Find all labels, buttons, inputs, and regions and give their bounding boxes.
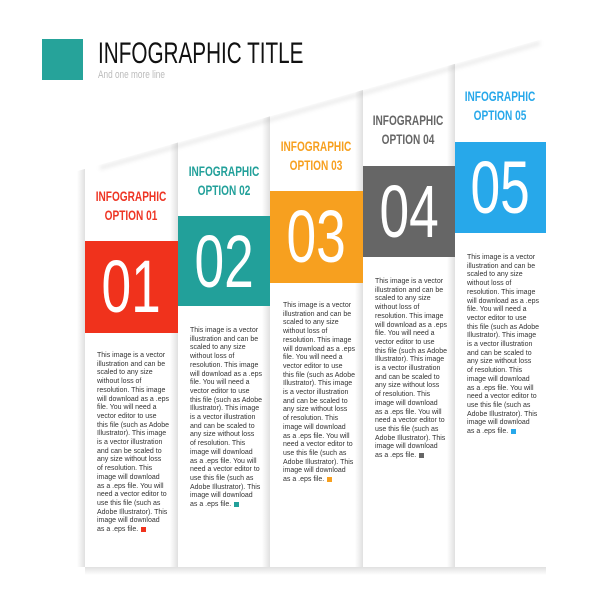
- text 3: vector editor to use: [283, 363, 343, 370]
- text 5: This image is a vector: [467, 254, 535, 261]
- text 5: scaled to any size: [467, 271, 523, 278]
- text 5: illustration and can be: [467, 263, 535, 270]
- text 2: is a vector illustration: [190, 414, 255, 421]
- heading 4: INFOGRAPHIC: [373, 112, 443, 128]
- text 5: need a vector editor to: [467, 393, 537, 400]
- text 4: Illustrator). This image: [375, 356, 444, 363]
- heading 2: [189, 163, 259, 198]
- number box 02: [178, 216, 270, 306]
- heading 2: OPTION 02: [198, 182, 250, 198]
- text 2: [190, 326, 262, 508]
- diagonal shadow line: [100, 43, 540, 168]
- text 5: of resolution. This: [467, 367, 522, 374]
- text 2: any size without loss: [190, 431, 254, 438]
- text 4: as a .eps file.: [375, 452, 416, 459]
- text 1: Illustrator). This image: [97, 430, 166, 437]
- text 1: This image is a vector: [97, 352, 165, 359]
- text 5: as a .eps file.: [467, 428, 508, 435]
- text 2: Adobe Illustrator). This: [190, 484, 260, 491]
- heading 3: [281, 138, 351, 173]
- text 3: and can be scaled to: [283, 398, 348, 405]
- text 2: as a .eps file.: [190, 501, 231, 508]
- text 2: file. You will need a: [190, 379, 250, 386]
- text 4: of resolution. This: [375, 391, 430, 398]
- text 4: as a .eps file. You will: [375, 409, 442, 416]
- text 5: use this file (such as: [467, 402, 530, 409]
- text 5: is a vector illustration: [467, 341, 532, 348]
- text 4: image will download: [375, 400, 438, 407]
- text 2: Illustrator). This image: [190, 405, 259, 412]
- text 2: illustration and can be: [190, 336, 258, 343]
- heading 2: INFOGRAPHIC: [189, 163, 259, 179]
- text 5: without loss of: [467, 280, 511, 287]
- text 3: This image is a vector: [283, 302, 351, 309]
- text 1: illustration and can be: [97, 361, 165, 368]
- text 3: this file (such as Adobe: [283, 372, 355, 379]
- text 1: need a vector editor to: [97, 491, 167, 498]
- text 2: image will download: [190, 492, 253, 499]
- text 2: This image is a vector: [190, 327, 258, 334]
- text 5: this file (such as Adobe: [467, 324, 539, 331]
- text 4: file. You will need a: [375, 330, 435, 337]
- text 3: of resolution. This: [283, 415, 338, 422]
- text 3: image will download: [283, 467, 346, 474]
- text 2: scaled to any size: [190, 344, 246, 351]
- text 3: [283, 302, 355, 483]
- text 5: as a .eps file. You will: [467, 385, 534, 392]
- text 1: image will download: [97, 517, 160, 524]
- text 5: Adobe Illustrator). This: [467, 411, 537, 418]
- text 1: use this file (such as: [97, 500, 160, 507]
- text 4: scaled to any size: [375, 295, 431, 302]
- text 5: will download as a .eps: [467, 298, 539, 305]
- text 4: and can be scaled to: [375, 374, 440, 381]
- number box 05: [455, 142, 546, 233]
- text 5: file. You will need a: [467, 306, 527, 313]
- text 1: this file (such as Adobe: [97, 422, 169, 429]
- text 5: resolution. This image: [467, 289, 535, 296]
- text 2: need a vector editor to: [190, 466, 260, 473]
- text 4: [375, 278, 447, 459]
- title: INFOGRAPHIC TITLE: [98, 37, 304, 70]
- text 1: resolution. This image: [97, 387, 165, 394]
- text 1: vector editor to use: [97, 413, 157, 420]
- text 5: any size without loss: [467, 358, 531, 365]
- text 3: scaled to any size: [283, 319, 339, 326]
- text 4: will download as a .eps: [375, 322, 447, 329]
- text 1: image will download: [97, 474, 160, 481]
- text 3: without loss of: [283, 328, 327, 335]
- text 2: this file (such as Adobe: [190, 397, 262, 404]
- text 4: This image is a vector: [375, 278, 443, 285]
- heading 5: OPTION 05: [474, 107, 526, 123]
- text 3: image will download: [283, 424, 346, 431]
- text 2: image will download: [190, 449, 253, 456]
- text 4: is a vector illustration: [375, 365, 440, 372]
- text 4: any size without loss: [375, 382, 439, 389]
- text 4: need a vector editor to: [375, 417, 445, 424]
- text 4: Adobe Illustrator). This: [375, 435, 445, 442]
- heading 3: INFOGRAPHIC: [281, 138, 351, 154]
- text 4: resolution. This image: [375, 313, 443, 320]
- text 3: as a .eps file.: [283, 476, 324, 483]
- text 5: image will download: [467, 419, 530, 426]
- text 5: [467, 254, 539, 435]
- subtitle: And one more line: [98, 69, 165, 81]
- title square: [42, 39, 83, 80]
- number box 01: [85, 241, 178, 333]
- text 4: image will download: [375, 443, 438, 450]
- text 5: vector editor to use: [467, 315, 527, 322]
- text 4: illustration and can be: [375, 287, 443, 294]
- text 1: scaled to any size: [97, 369, 153, 376]
- text 1: any size without loss: [97, 456, 161, 463]
- text 2: without loss of: [190, 353, 234, 360]
- heading 3: OPTION 03: [290, 157, 342, 173]
- text 2: vector editor to use: [190, 388, 250, 395]
- heading 1: OPTION 01: [105, 207, 157, 223]
- number box 01: 01: [102, 245, 161, 328]
- text 1: will download as a .eps: [97, 396, 169, 403]
- text 4: vector editor to use: [375, 339, 435, 346]
- text 1: is a vector illustration: [97, 439, 162, 446]
- text 1: Adobe Illustrator). This: [97, 509, 167, 516]
- text 4: use this file (such as: [375, 426, 438, 433]
- number box 04: [363, 166, 455, 257]
- text 3: file. You will need a: [283, 354, 343, 361]
- text 2: will download as a .eps: [190, 371, 262, 378]
- number box 03: 03: [287, 195, 346, 278]
- heading 4: [373, 112, 443, 147]
- number box 03: [270, 191, 363, 283]
- text 5: image will download: [467, 376, 530, 383]
- text 3: any size without loss: [283, 406, 347, 413]
- text 1: as a .eps file. You will: [97, 483, 164, 490]
- number box 04: 04: [379, 170, 439, 253]
- text 2: resolution. This image: [190, 362, 258, 369]
- text 3: is a vector illustration: [283, 389, 348, 396]
- text 3: as a .eps file. You will: [283, 433, 350, 440]
- text 5: and can be scaled to: [467, 350, 532, 357]
- heading 5: [465, 88, 535, 123]
- heading 1: INFOGRAPHIC: [96, 188, 166, 204]
- heading 5: INFOGRAPHIC: [465, 88, 535, 104]
- text 2: and can be scaled to: [190, 423, 255, 430]
- text 2: use this file (such as: [190, 475, 253, 482]
- text 3: Illustrator). This image: [283, 380, 352, 387]
- text 3: need a vector editor to: [283, 441, 353, 448]
- text 1: [97, 352, 169, 533]
- text 1: without loss of: [97, 378, 141, 385]
- text 1: as a .eps file.: [97, 526, 138, 533]
- text 3: will download as a .eps: [283, 346, 355, 353]
- heading 1: [96, 188, 166, 223]
- text 4: this file (such as Adobe: [375, 348, 447, 355]
- text 2: of resolution. This: [190, 440, 245, 447]
- text 1: and can be scaled to: [97, 448, 162, 455]
- text 3: resolution. This image: [283, 337, 351, 344]
- text 5: Illustrator). This image: [467, 332, 536, 339]
- text 1: file. You will need a: [97, 404, 157, 411]
- text 2: as a .eps file. You will: [190, 458, 257, 465]
- text 3: Adobe Illustrator). This: [283, 459, 353, 466]
- heading 4: OPTION 04: [382, 131, 434, 147]
- text 4: without loss of: [375, 304, 419, 311]
- text 3: use this file (such as: [283, 450, 346, 457]
- text 3: illustration and can be: [283, 311, 351, 318]
- text 1: of resolution. This: [97, 465, 152, 472]
- number box 05: 05: [471, 146, 530, 229]
- number box 02: 02: [194, 220, 254, 303]
